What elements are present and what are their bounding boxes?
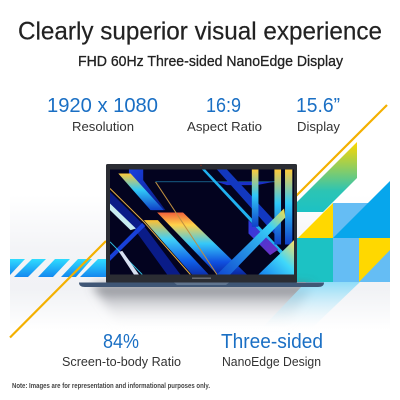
stat: nanoedge xyxy=(221,331,323,369)
light blue beam under laptop xyxy=(262,282,360,328)
left orange diagonal line xyxy=(10,241,106,338)
yellow triangle left xyxy=(290,203,333,238)
aspect ratio label: Aspect Ratio xyxy=(187,120,262,134)
stat: screen-to-body xyxy=(62,331,181,369)
subtitle: FHD 60Hz Three-sided NanoEdge Display xyxy=(78,53,343,70)
stat: resolution xyxy=(47,95,158,134)
laptop xyxy=(79,164,324,287)
footnote: Note: Images are for representation and informational purposes only. xyxy=(12,381,210,390)
screen xyxy=(110,170,294,274)
green gradient parallelogram xyxy=(290,142,357,212)
aspect ratio value: 16:9 xyxy=(206,95,241,117)
screen-to-body value: 84% xyxy=(103,331,139,353)
yellow shape right xyxy=(359,238,390,282)
display label: Display xyxy=(297,120,341,134)
display value: 15.6” xyxy=(296,95,340,117)
laptop hinge notch xyxy=(174,282,229,285)
light blue panel xyxy=(333,203,390,282)
nanoedge value: Three-sided xyxy=(221,331,323,353)
right orange diagonal line xyxy=(290,105,387,202)
right geometric blocks xyxy=(290,142,390,282)
laptop lid xyxy=(106,164,297,283)
left blue stripes xyxy=(10,259,110,277)
stat: display xyxy=(296,95,341,134)
nanoedge label: NanoEdge Design xyxy=(222,355,321,369)
brand label xyxy=(192,278,211,279)
laptop shadow xyxy=(92,285,312,326)
resolution label: Resolution xyxy=(72,120,134,134)
resolution value: 1920 x 1080 xyxy=(47,95,158,117)
webcam dot xyxy=(200,165,202,166)
background grey haze xyxy=(10,195,390,330)
screen-to-body label: Screen-to-body Ratio xyxy=(62,355,181,369)
laptop base xyxy=(79,282,324,287)
teal block xyxy=(290,238,333,282)
title: Clearly superior visual experience xyxy=(18,18,382,46)
stat: aspect ratio xyxy=(187,95,262,134)
bright blue triangle xyxy=(333,181,390,238)
